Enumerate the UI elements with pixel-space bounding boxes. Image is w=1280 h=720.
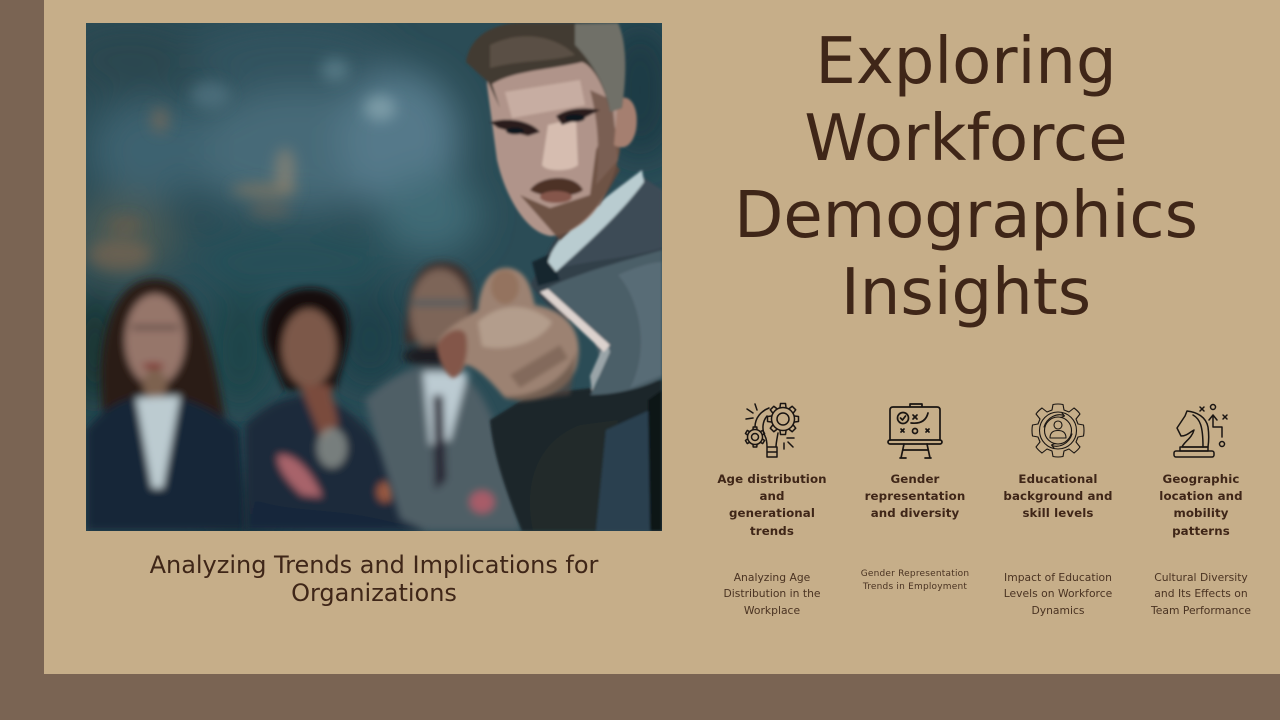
heading xyxy=(717,472,827,538)
description: Cultural Diversity xyxy=(1154,571,1248,584)
description: Dynamics xyxy=(1031,604,1084,617)
description: Analyzing Age xyxy=(734,571,810,584)
description: and Its Effects on xyxy=(1154,587,1248,600)
heading xyxy=(1159,472,1243,538)
description: Workplace xyxy=(744,604,800,617)
heading: generational xyxy=(729,506,815,520)
photo subtitle: Organizations xyxy=(291,579,457,607)
column: age distribution xyxy=(717,402,827,617)
main title: Demographics xyxy=(734,178,1198,252)
photo subtitle xyxy=(150,551,598,607)
main title xyxy=(734,24,1198,330)
photo: manager pointing in front of blurred team xyxy=(86,23,662,531)
heading: location and xyxy=(1159,489,1243,503)
main title: Exploring xyxy=(815,24,1117,98)
icon: gear with person xyxy=(1031,404,1085,458)
heading: and diversity xyxy=(871,506,959,520)
heading: background and xyxy=(1003,489,1113,503)
description xyxy=(724,571,820,617)
description: Impact of Education xyxy=(1004,571,1112,584)
main title: Workforce xyxy=(804,102,1128,176)
main title: Insights xyxy=(841,256,1091,330)
description: Levels on Workforce xyxy=(1004,587,1112,600)
description xyxy=(861,569,969,592)
heading: patterns xyxy=(1172,524,1230,538)
heading: Age distribution xyxy=(717,472,827,486)
heading xyxy=(1003,472,1113,520)
description: Gender Representation xyxy=(861,569,969,579)
heading: Gender xyxy=(891,472,939,486)
heading: skill levels xyxy=(1022,506,1094,520)
main man suit body xyxy=(490,170,662,531)
icon: strategy board on easel xyxy=(887,403,943,459)
description xyxy=(1004,571,1112,617)
heading: Geographic xyxy=(1163,472,1239,486)
heading: trends xyxy=(750,524,794,538)
icon: lightbulb with gears xyxy=(744,402,800,458)
description xyxy=(1150,571,1251,617)
column: gender representation xyxy=(861,403,969,592)
photo subtitle: Analyzing Trends and Implications for xyxy=(150,551,598,579)
heading xyxy=(865,472,965,520)
description: Trends in Employment xyxy=(863,582,967,592)
icon: chess knight with moves xyxy=(1173,404,1228,458)
blurred woman left xyxy=(86,279,248,531)
main man hand xyxy=(437,268,579,402)
description: Team Performance xyxy=(1151,604,1251,617)
heading: and xyxy=(759,489,785,503)
main man head xyxy=(466,23,637,240)
description: Distribution in the xyxy=(724,587,820,600)
heading: mobility xyxy=(1173,506,1229,520)
blurred man right rear xyxy=(365,262,522,531)
blurred woman centre xyxy=(245,288,425,531)
heading: Educational xyxy=(1018,472,1098,486)
column: educational background xyxy=(1003,404,1113,617)
heading: representation xyxy=(865,489,965,503)
column: geographic location xyxy=(1150,404,1251,617)
